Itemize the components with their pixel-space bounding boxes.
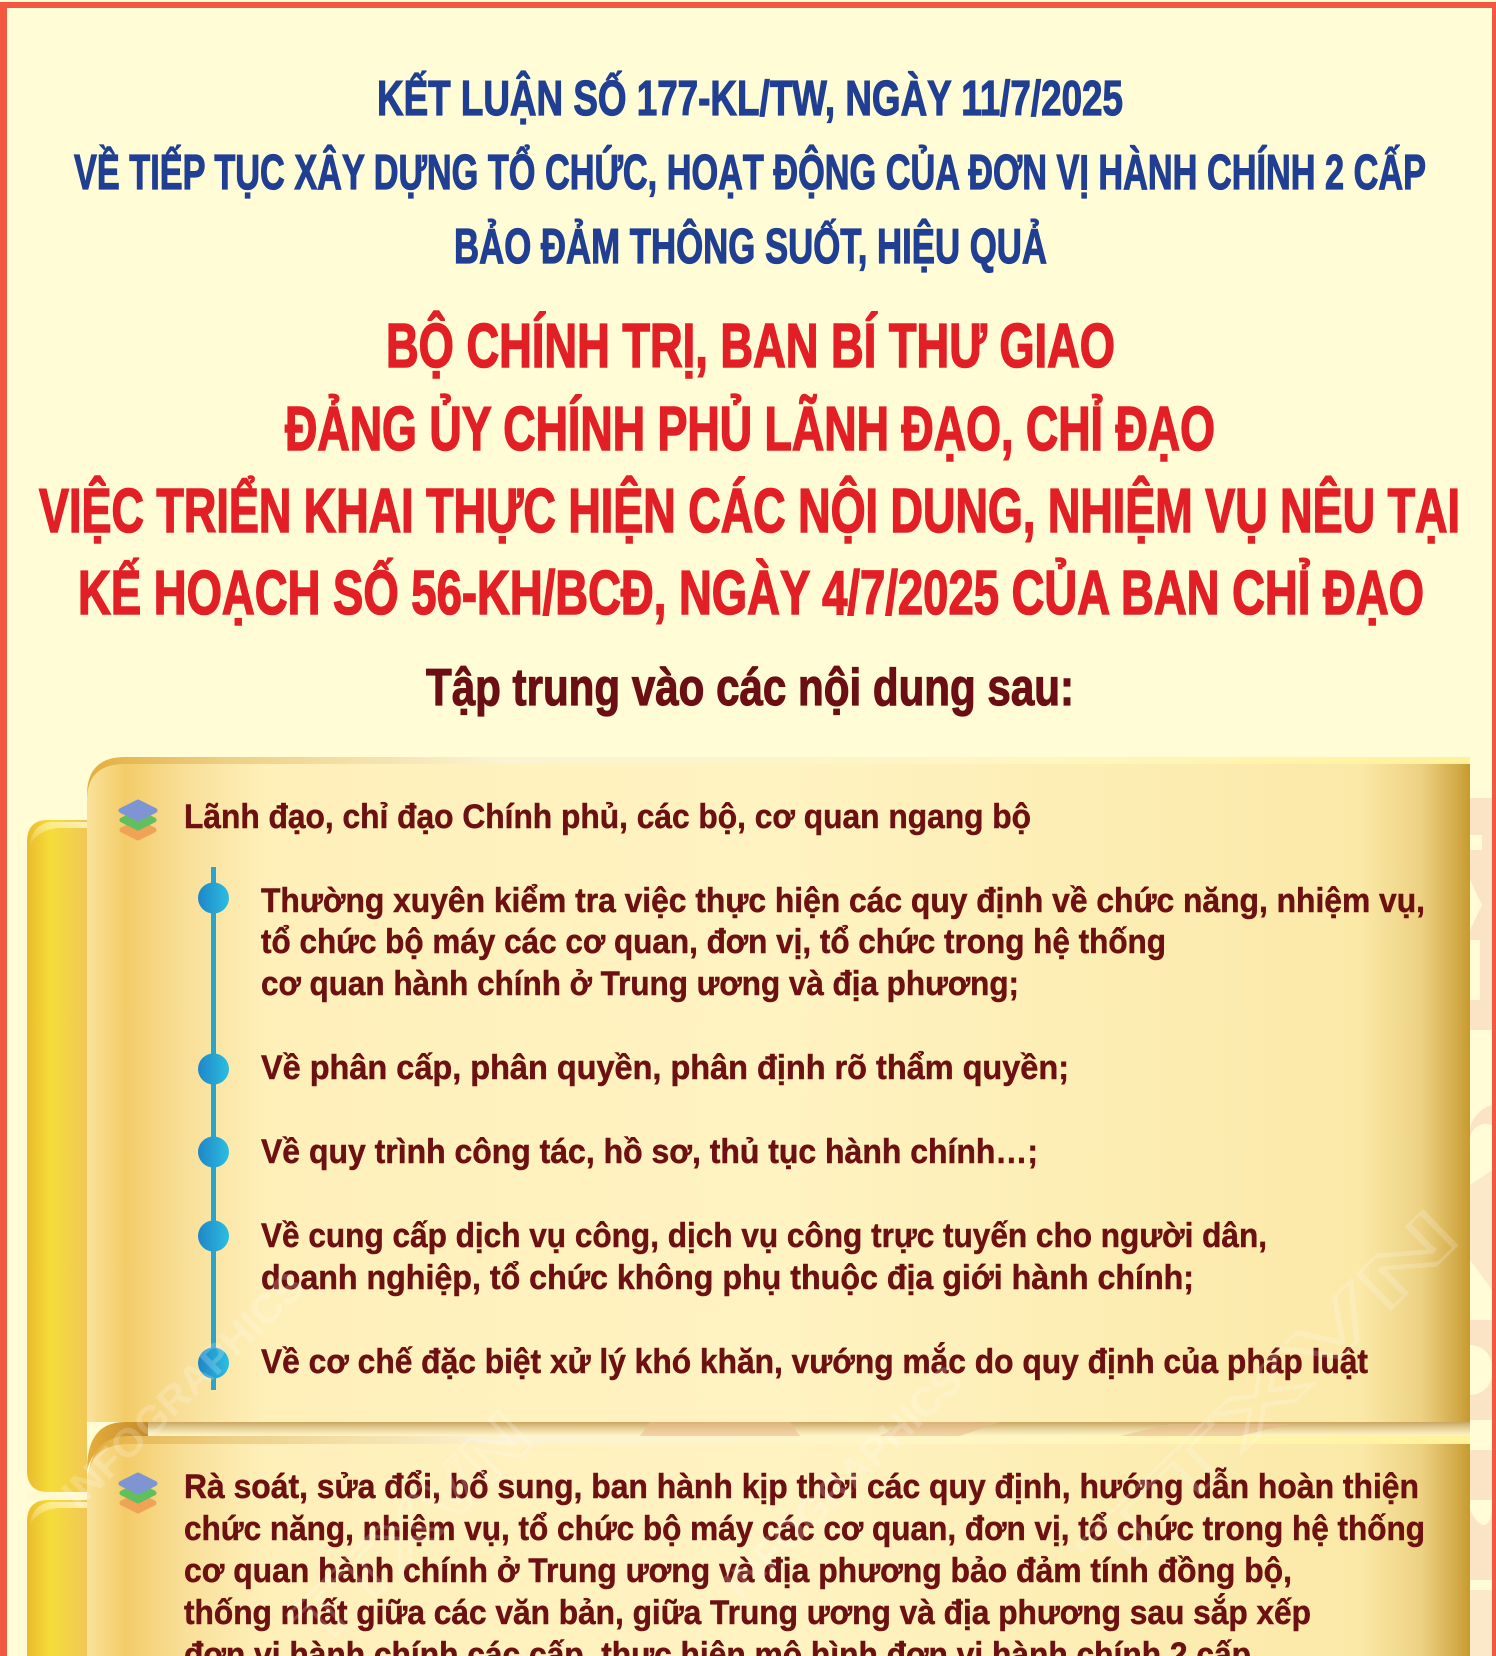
icon: layers 1: [121, 802, 155, 838]
gap highlight between tabs: [27, 1492, 87, 1500]
back tab 1: [27, 820, 87, 1492]
band between panels: [87, 1422, 1470, 1470]
text: item 1: Thường xuyên kiểm tra việc thực hiện các quy định về chức năng, nhiệm vụ,: [261, 882, 1425, 920]
watermark: INFOGRAPHICS: [716, 1357, 971, 1606]
text: section 2: chức năng, nhiệm vụ, tổ chức bộ máy các cơ quan, đơn vị, tổ chức trong hệ thống: [184, 1510, 1425, 1548]
text: item 2: Về phân cấp, phân quyền, phân định rõ thẩm quyền;: [261, 1049, 1069, 1087]
text: section 2: Rà soát, sửa đổi, bổ sung, ban hành kịp thời các quy định, hướng dẫn hoàn thiện: [184, 1468, 1419, 1506]
panel 1 body: [87, 764, 1470, 1422]
text: item 4: Về cung cấp dịch vụ công, dịch vụ công trực tuyến cho người dân,: [261, 1217, 1267, 1255]
text: item 1: tổ chức bộ máy các cơ quan, đơn vị, tổ chức trong hệ thống: [261, 923, 1166, 961]
panel 2 top edge: [88, 1436, 1470, 1480]
title: blue heading: [74, 71, 1426, 274]
title: blue heading: BẢO ĐẢM THÔNG SUỐT, HIỆU QUẢ: [454, 219, 1047, 274]
icon: layers 2: [121, 1475, 155, 1511]
title: red heading: BỘ CHÍNH TRỊ, BAN BÍ THƯ GIAO: [386, 312, 1115, 381]
watermark: TTXVN: [1066, 1194, 1473, 1591]
text: item 1: [261, 882, 1425, 1003]
heading: section 1: Lãnh đạo, chỉ đạo Chính phủ, các bộ, cơ quan ngang bộ: [184, 798, 1031, 836]
text: item 3: Về quy trình công tác, hồ sơ, thủ tục hành chính…;: [261, 1133, 1038, 1171]
timeline: [198, 867, 229, 1390]
text: item 4: [261, 1217, 1267, 1297]
panel 1: [87, 757, 1470, 1422]
text: item 5: Về cơ chế đặc biệt xử lý khó khăn, vướng mắc do quy định của pháp luật: [261, 1343, 1368, 1381]
text: item 1: cơ quan hành chính ở Trung ương và địa phương;: [261, 965, 1019, 1003]
background ornament pattern: [1470, 798, 1492, 1656]
panel 1 top edge: [87, 757, 1470, 800]
text: item 4: doanh nghiệp, tổ chức không phụ thuộc địa giới hành chính;: [261, 1259, 1194, 1297]
watermark: INFOGRAPHICS: [54, 1264, 313, 1516]
watermark: [54, 1194, 1473, 1656]
panel 2 body: [87, 1444, 1470, 1656]
text: section 2: cơ quan hành chính ở Trung ương và địa phương bảo đảm tính đồng bộ,: [184, 1552, 1292, 1590]
back tab 2: [27, 1500, 87, 1656]
title: blue heading: KẾT LUẬN SỐ 177-KL/TW, NGÀY 11/7/2025: [377, 71, 1123, 126]
subheading: Tập trung vào các nội dung sau:: [426, 659, 1074, 717]
text: section 2: thống nhất giữa các văn bản, giữa Trung ương và địa phương sau sắp xếp: [184, 1594, 1311, 1632]
panel 2: [87, 1436, 1470, 1656]
title: red heading: [39, 312, 1460, 628]
watermark: TTXVN: [276, 1396, 546, 1656]
text: section 2: [184, 1468, 1425, 1656]
